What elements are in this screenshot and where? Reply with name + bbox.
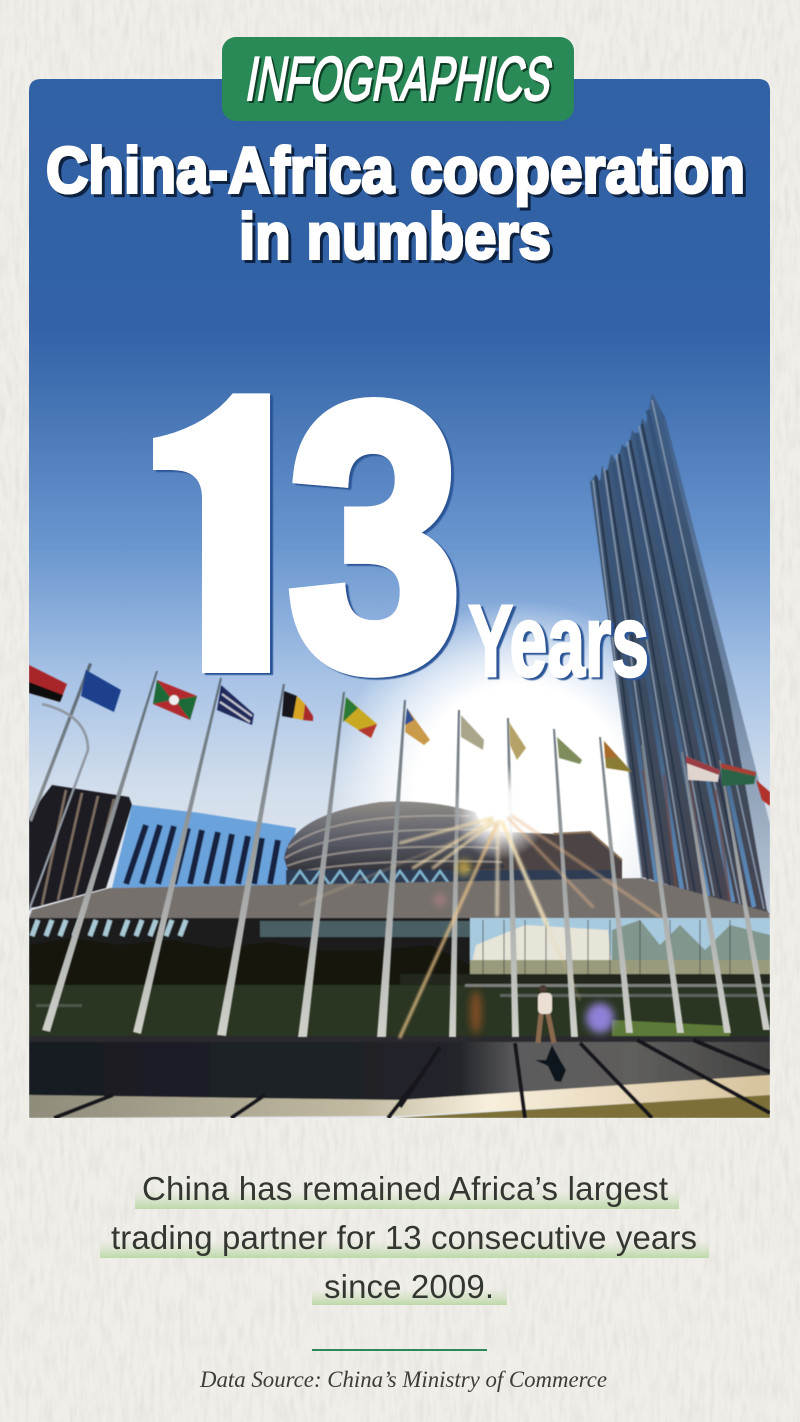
path lines across lawn	[465, 984, 770, 987]
title: in numbers	[239, 200, 551, 272]
panel: photo of African Union headquarters	[29, 79, 770, 1118]
title: China-Africa cooperation	[46, 134, 745, 206]
dome	[284, 801, 505, 878]
glass wall: bright reflection section	[469, 918, 770, 960]
glass wall: dark section	[29, 917, 471, 966]
person	[535, 985, 566, 1082]
band beneath glass	[400, 973, 770, 985]
far building between dome and tower	[470, 830, 622, 882]
sidewalk	[29, 1075, 770, 1118]
flag: Congo	[343, 697, 377, 738]
flag poles	[29, 663, 770, 1037]
sun glow in sky	[344, 606, 641, 878]
description text: trading partner for 13 consecutive years	[111, 1219, 697, 1256]
title	[46, 134, 745, 272]
big number: 13	[125, 328, 461, 746]
photo scene	[29, 393, 770, 1118]
grass verge	[395, 1095, 770, 1118]
road	[29, 1042, 770, 1102]
badge label: INFOGRAPHICS	[242, 44, 558, 114]
flag: Ghana	[604, 741, 632, 772]
description text	[111, 1170, 697, 1305]
flags	[29, 665, 770, 806]
flag: Libya	[721, 763, 756, 786]
big number: 13: 3	[289, 328, 461, 746]
roof canopy	[29, 878, 770, 918]
facade dark slots	[126, 825, 278, 884]
left building: blue glass facade	[112, 805, 296, 888]
flag: Egypt-like	[686, 756, 720, 782]
lawn	[29, 985, 770, 1036]
reflected trees	[612, 920, 770, 961]
text highlights	[100, 1190, 709, 1305]
sky gradient	[29, 79, 770, 1118]
flag: Angola	[29, 665, 67, 702]
badge: INFOGRAPHICS	[222, 37, 574, 121]
flag: pale 2	[509, 722, 526, 760]
trees / shrubs	[29, 938, 470, 990]
description text: China has remained Africa’s largest	[142, 1170, 668, 1207]
tower	[590, 393, 770, 915]
curb	[29, 1036, 770, 1043]
divider rule	[312, 1349, 487, 1351]
pole shadows on road	[54, 1040, 770, 1118]
sunlit grass patch	[612, 1020, 730, 1036]
left building: vertical fins	[42, 790, 114, 905]
flag: pale 1	[461, 715, 484, 750]
label: Years: Years	[468, 584, 649, 698]
flag: pale 3	[557, 737, 582, 764]
flag: Comoros	[405, 708, 430, 745]
flag: Cape Verde blue	[81, 670, 121, 712]
flag: Central stripes	[217, 685, 254, 725]
glass wall: pale strip	[32, 920, 186, 936]
data source: Data Source: China’s Ministry of Commerce	[199, 1367, 607, 1392]
band beneath dome	[286, 870, 616, 887]
lens flares	[434, 860, 614, 1034]
flag: far right	[756, 780, 770, 806]
left building: dark wing	[29, 785, 132, 908]
warm edge of far building	[553, 832, 622, 860]
sun rays	[300, 816, 660, 1037]
sun core	[452, 764, 548, 860]
street lamp	[29, 704, 88, 910]
glass mullions	[483, 920, 730, 974]
flag: Chad	[282, 691, 297, 718]
description text: since 2009.	[324, 1268, 494, 1305]
reflected white buildings	[472, 924, 612, 960]
big number: 13: 1	[125, 328, 332, 745]
flag: Burundi	[153, 680, 197, 720]
